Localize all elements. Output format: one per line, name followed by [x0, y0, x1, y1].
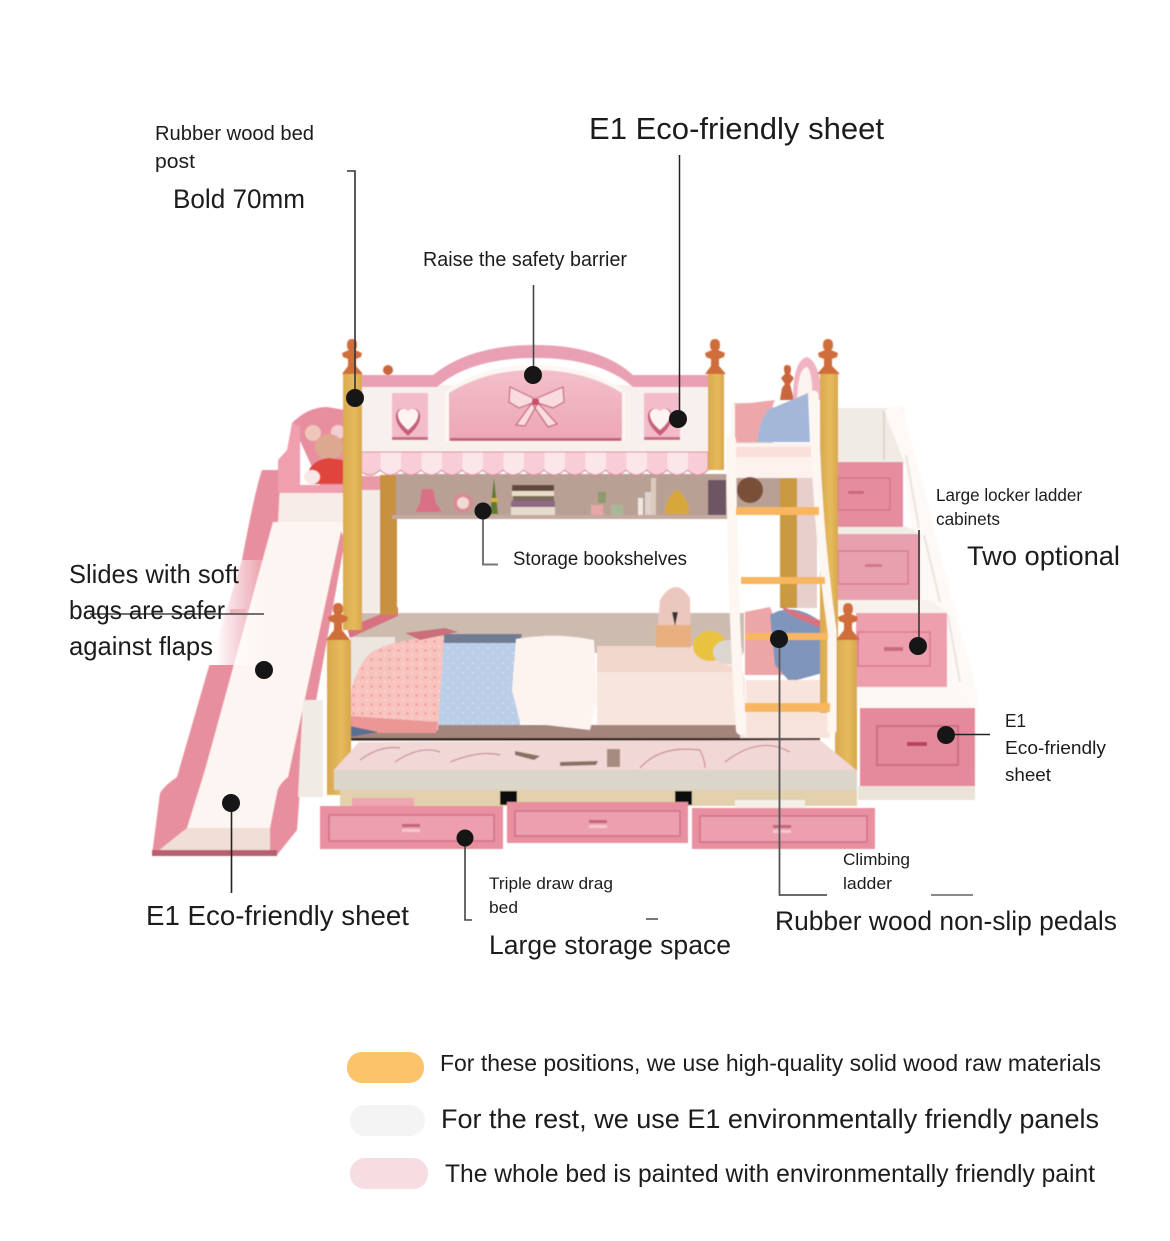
legend item: E1 panels: For the rest, we use E1 environmentally friendly panels: [441, 1104, 1099, 1134]
stair cabinet: [838, 405, 978, 800]
label: climbing ladder: Rubber wood non-slip pedals: [775, 906, 1117, 936]
label: safety barrier: Raise the safety barrier: [423, 248, 627, 271]
white patch behind slide caption: [60, 560, 264, 665]
ladder rails: [731, 395, 832, 730]
upper bunk pillows: [733, 393, 813, 479]
legend item: solid wood: For these positions, we use high-quality solid wood raw materials: [440, 1050, 1101, 1076]
legend item: paint: The whole bed is painted with environmentally friendly paint: [445, 1160, 1095, 1188]
lower wall and back panel: [347, 475, 744, 707]
label: locker ladder cabinets: cabinets: [936, 509, 1000, 529]
post finials: [326, 339, 860, 640]
label: right E1 eco-friendly sheet: sheet: [1005, 764, 1051, 785]
label: locker ladder cabinets: Two optional: [967, 541, 1120, 571]
label: slides with soft bags: against flaps: [69, 631, 213, 661]
label: climbing ladder: Climbing: [843, 850, 910, 869]
heart panel right: [644, 393, 680, 440]
label: locker ladder cabinets: Large locker ladder: [936, 485, 1082, 505]
label: rubber wood bed post: [155, 123, 314, 214]
pink slide edge showing through caption patch: [230, 609, 246, 613]
scalloped awning: [360, 452, 708, 475]
label: rubber wood bed post: Bold 70mm: [173, 184, 305, 214]
stair drawer 4: [860, 708, 975, 786]
upper posts: [343, 373, 838, 713]
label: storage bookshelves: Storage bookshelves: [513, 548, 687, 570]
ladder steps: [736, 507, 830, 712]
plush toy and pillow: [656, 587, 743, 664]
knob on headboard rail: [383, 365, 393, 375]
stair drawer 1: [838, 462, 903, 527]
leader lines: [90, 155, 990, 920]
shelf with objects: [392, 474, 728, 519]
label: right E1 eco-friendly sheet: [1005, 710, 1107, 785]
label: triple draw drag bed: bed: [489, 898, 518, 917]
illustration: pink bunk bed: [152, 339, 978, 856]
marker dots: [222, 366, 955, 846]
label: bottom E1 eco-friendly sheet: E1 Eco-friendly sheet: [146, 900, 409, 931]
label: rubber wood bed post: post: [155, 151, 195, 173]
label: triple draw drag bed: Triple draw drag: [489, 874, 613, 893]
bow ornament: [509, 387, 564, 427]
label: rubber wood bed post: Rubber wood bed: [155, 123, 314, 145]
heart panel left: [392, 393, 428, 440]
trundle drawer middle: [507, 802, 688, 843]
label: top E1 eco-friendly sheet: E1 Eco-friendly sheet: [589, 111, 884, 146]
slide and side tower: [152, 407, 345, 856]
headboard: [362, 345, 708, 455]
lower bed mattress and bedding: [345, 628, 820, 740]
lower ladder bedding: [745, 606, 830, 738]
label: right E1 eco-friendly sheet: E1: [1005, 710, 1026, 731]
legend: [347, 1050, 1101, 1189]
label: slides with soft bags: [69, 559, 240, 661]
trundle drawer right: [692, 808, 875, 849]
label: triple draw drag bed: Large storage space: [489, 930, 731, 960]
trundle bed: [334, 740, 857, 808]
area behind ladder: [733, 477, 817, 608]
label: climbing ladder: [775, 850, 1117, 936]
label: slides with soft bags: bags are safer: [69, 595, 225, 625]
label: climbing ladder: ladder: [843, 874, 892, 893]
label: right E1 eco-friendly sheet: Eco-friendly: [1005, 737, 1107, 758]
stair drawer 2: [838, 534, 920, 600]
label: locker ladder cabinets: [936, 485, 1120, 571]
label: triple draw drag bed: [489, 874, 731, 960]
stair drawer 3: [856, 613, 947, 687]
legend item: solid wood: [347, 1050, 1101, 1083]
lower posts: [327, 640, 857, 795]
trundle drawer left: [320, 806, 503, 849]
label: slides with soft bags: Slides with soft: [69, 559, 240, 589]
upper side arch and small finial: [780, 357, 820, 400]
mouse toy: [304, 425, 345, 484]
